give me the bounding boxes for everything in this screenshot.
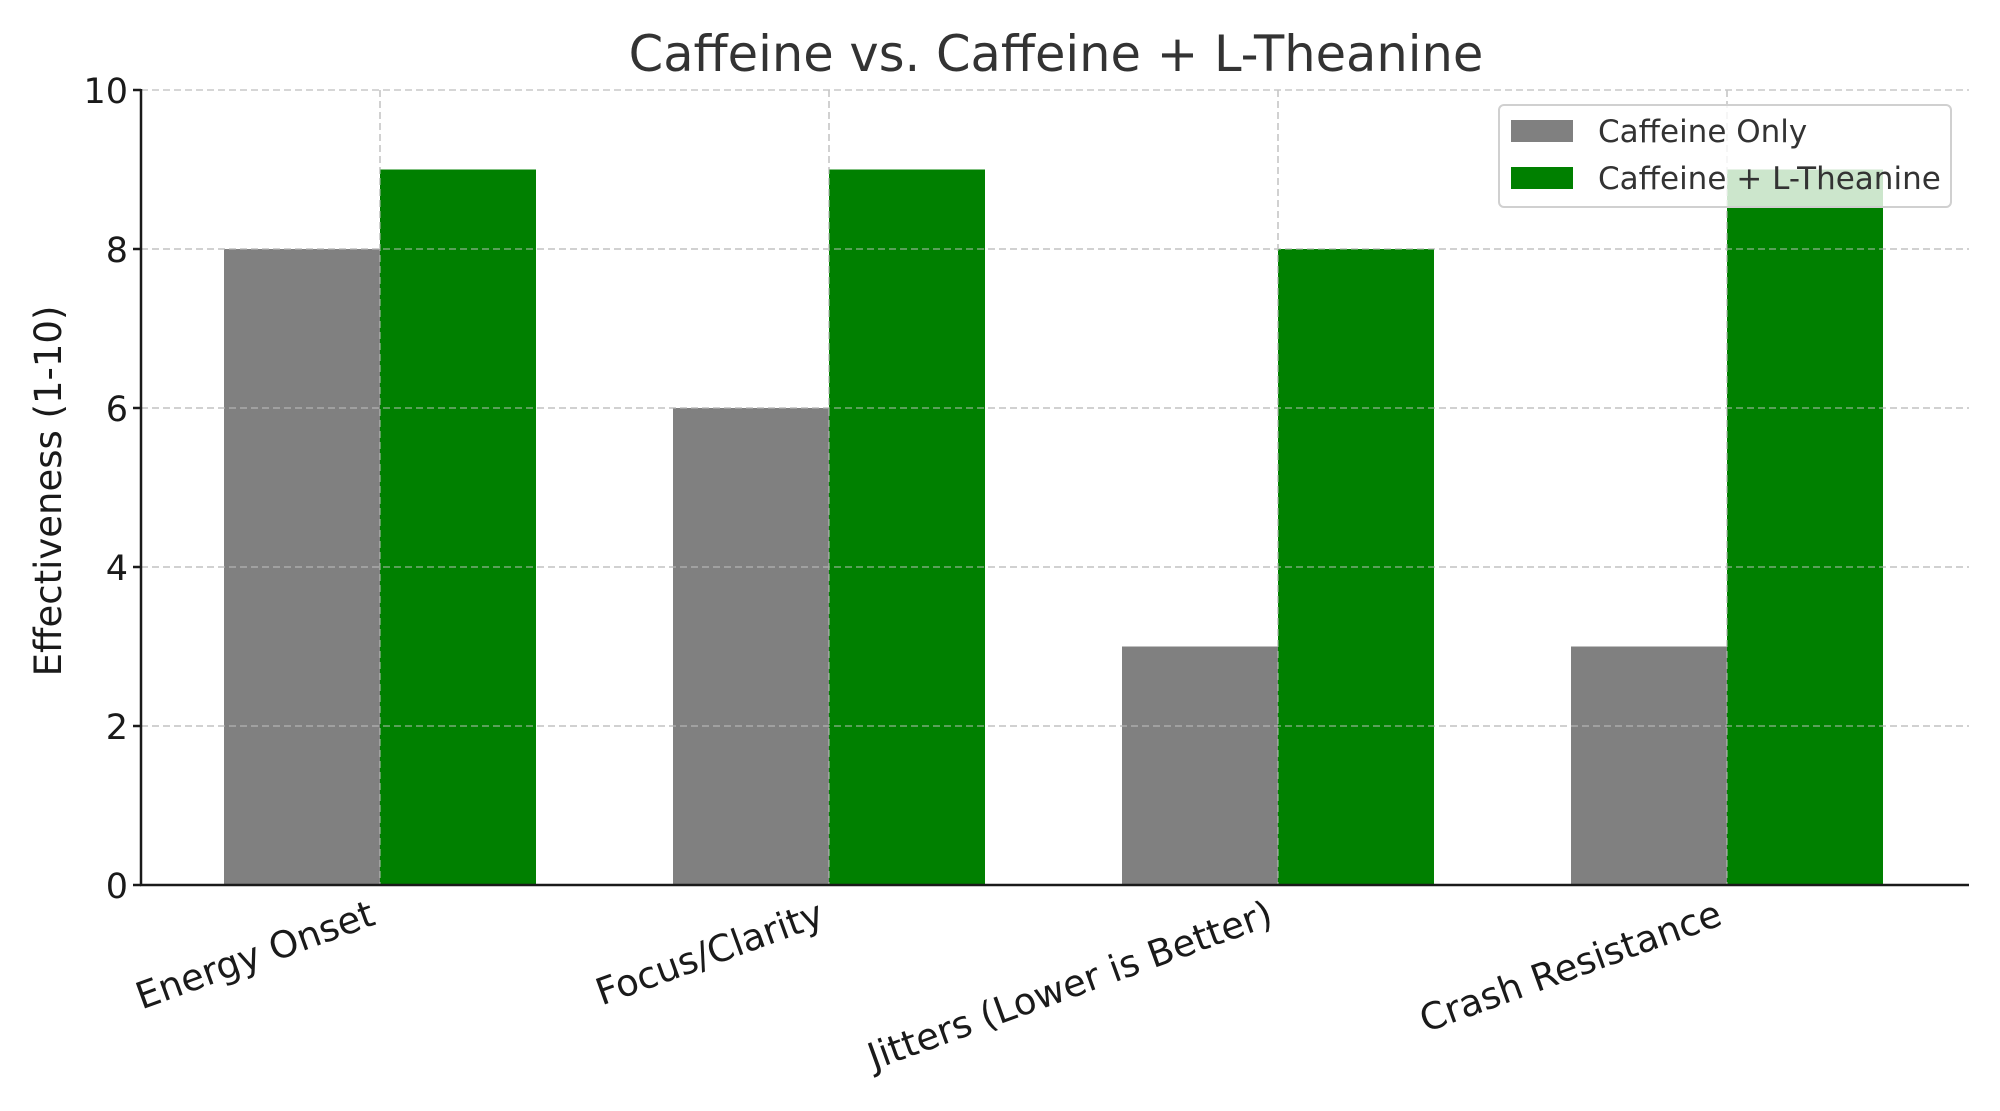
x tick labels: Crash Resistance — [1414, 892, 1727, 1041]
bars: Jitters — [1122, 249, 1434, 885]
y tick labels: 0 — [106, 867, 128, 907]
y tick labels — [83, 72, 128, 907]
legend — [1499, 105, 1951, 207]
bars: Crash Resistance — [1571, 170, 1883, 885]
y tick labels: 8 — [106, 231, 128, 271]
x tick labels: Focus/Clarity — [590, 892, 829, 1014]
y axis label: Effectiveness (1-10) — [27, 306, 70, 676]
axes — [133, 89, 1969, 886]
x tick labels — [130, 892, 1727, 1079]
bars: Energy Onset — [224, 170, 536, 885]
y tick labels: 2 — [106, 708, 128, 748]
x tick labels: Jitters (Lower is Better) — [860, 892, 1278, 1079]
y tick labels: 6 — [106, 390, 128, 430]
legend: Caffeine Only — [1598, 114, 1807, 150]
y tick labels: 10 — [83, 72, 128, 112]
x tick labels: Energy Onset — [130, 892, 380, 1018]
y tick labels: 4 — [106, 549, 128, 589]
title: Caffeine vs. Caffeine + L-Theanine — [629, 25, 1483, 83]
bar chart — [224, 170, 1883, 885]
legend: Caffeine + L-Theanine — [1598, 161, 1941, 197]
bars: Focus/Clarity — [673, 170, 985, 885]
